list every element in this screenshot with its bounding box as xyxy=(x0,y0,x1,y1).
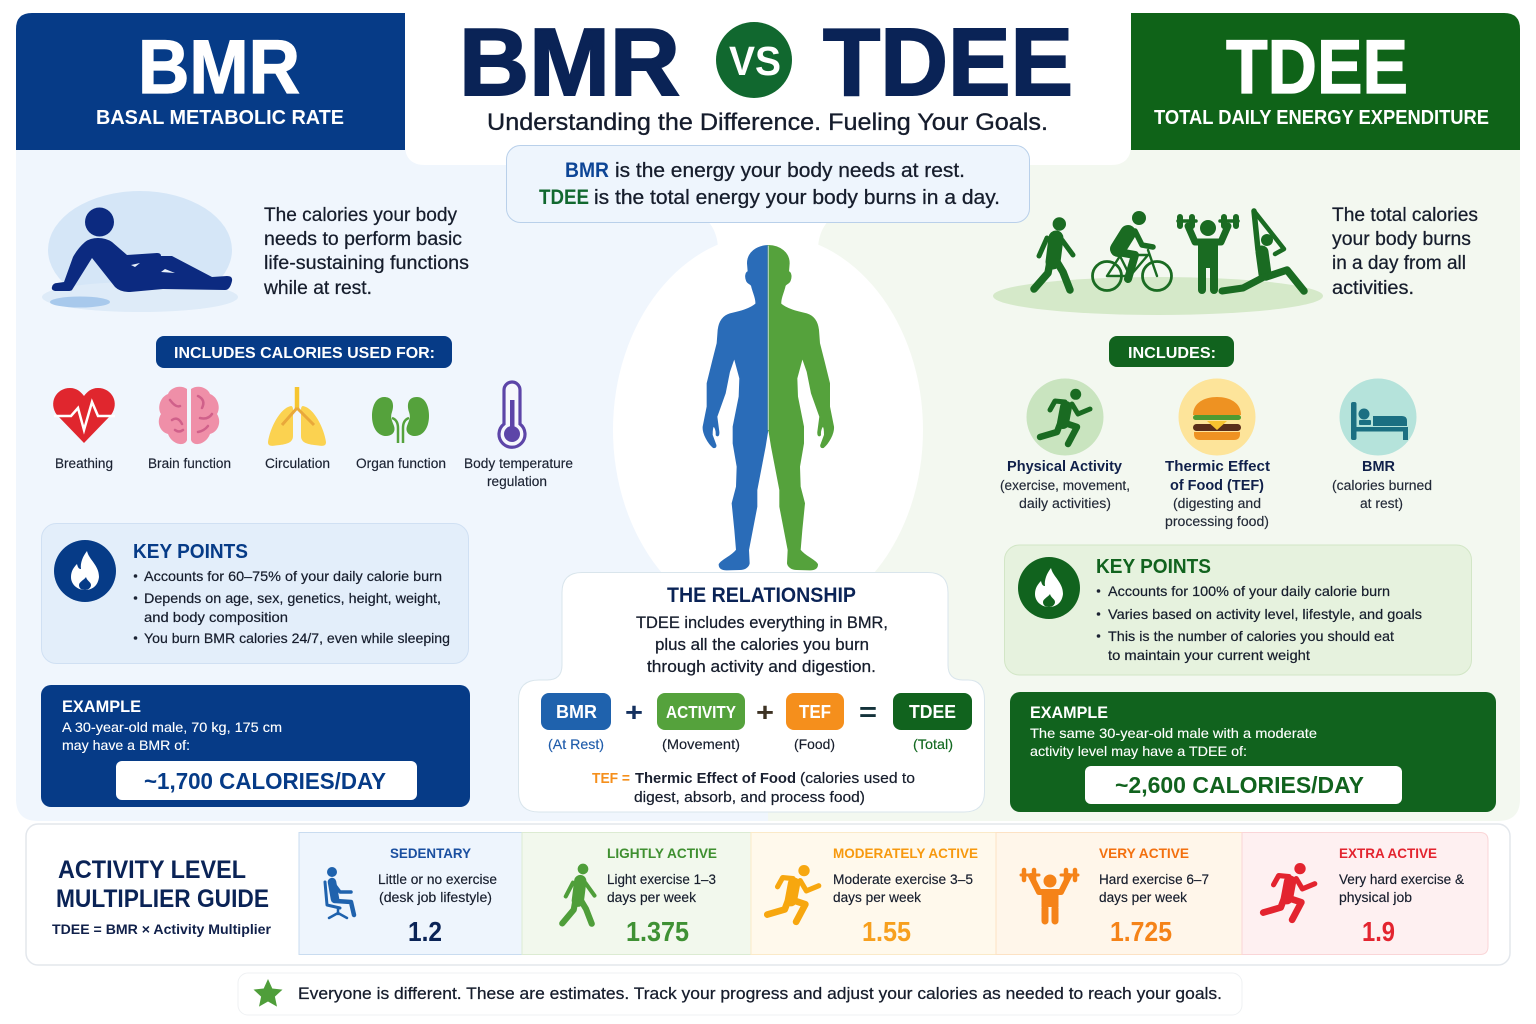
main title xyxy=(459,9,1073,116)
guide heading: MULTIPLIER GUIDE xyxy=(56,885,269,913)
heading: KEY POINTS xyxy=(1096,556,1211,578)
icon: running person xyxy=(767,865,819,922)
label: BMR component: (calories burned xyxy=(1332,478,1432,493)
label: body temperature regulation xyxy=(464,456,573,489)
equation: TEF: TEF xyxy=(799,701,831,722)
TDEE description: in a day from all xyxy=(1332,253,1466,274)
panel: TDEE example: The same 30-year-old male with a moderate xyxy=(1030,725,1317,741)
icon: lungs xyxy=(268,387,326,446)
icon: burger xyxy=(1178,378,1256,456)
TDEE description: activities. xyxy=(1332,278,1414,299)
TDEE description: your body burns xyxy=(1332,229,1471,250)
icon: flame xyxy=(1018,557,1080,619)
definition callout: BMR xyxy=(565,159,609,182)
plus sign: + xyxy=(625,697,643,727)
card: sedentary xyxy=(299,832,522,954)
description: plus all the calories you burn xyxy=(655,636,869,654)
icon: flame xyxy=(54,540,116,602)
card: lightly active: LIGHTLY ACTIVE xyxy=(607,845,717,861)
bullet list: Varies based on activity level, lifestyle, and goals xyxy=(1108,606,1422,622)
card: lightly active xyxy=(522,832,751,954)
icon: thermometer xyxy=(499,382,525,447)
bullet list xyxy=(1097,583,1422,663)
guide heading xyxy=(52,856,272,937)
background: BMR side xyxy=(16,140,775,821)
value: 2600 calories xyxy=(1085,766,1402,804)
equation: activity xyxy=(657,693,745,752)
BMR description: needs to perform basic xyxy=(264,229,462,250)
label: brain function: Brain function xyxy=(148,456,231,471)
header centre backing xyxy=(405,0,1131,165)
white centre halo behind the body xyxy=(613,220,923,626)
definition callout xyxy=(506,146,1030,222)
equation: BMR: (At Rest) xyxy=(548,736,604,752)
equation: TEF xyxy=(786,693,844,752)
equation: activity: (Movement) xyxy=(662,736,740,752)
bullet list: Accounts for 100% of your daily calorie burn xyxy=(1108,583,1390,599)
panel: TDEE example xyxy=(1010,692,1496,812)
pill: includes calories used for: INCLUDES CALORIES USED FOR: xyxy=(174,345,435,362)
label: organ function: Organ function xyxy=(356,456,446,471)
card: lightly active: days per week xyxy=(607,890,696,905)
yoga pose xyxy=(1222,211,1304,291)
panel: TDEE example: EXAMPLE xyxy=(1030,703,1108,722)
TDEE description: The total calories xyxy=(1332,205,1478,226)
label: physical activity xyxy=(1000,459,1130,511)
TDEE description xyxy=(1332,205,1478,299)
card: moderately active: days per week xyxy=(833,890,921,905)
card: lightly active: Light exercise 1–3 xyxy=(607,872,716,887)
panel: BMR key points xyxy=(42,524,468,664)
card: sedentary: (desk job lifestyle) xyxy=(379,890,492,905)
BMR description: life-sustaining functions xyxy=(264,253,469,274)
footer note: Everyone is different. These are estimates. Track your progress and adjust your calories as needed to reach your goals. xyxy=(298,985,1222,1003)
BMR description xyxy=(263,205,469,299)
definition callout: is the total energy your body burns in a day. xyxy=(594,186,1000,209)
TDEE header panel xyxy=(1131,13,1520,150)
bullet list: You burn BMR calories 24/7, even while sleeping xyxy=(144,630,450,646)
heading: THE RELATIONSHIP xyxy=(667,584,856,607)
panel: the relationship xyxy=(518,572,984,812)
equation: BMR xyxy=(541,693,611,752)
icon: weightlifter xyxy=(1021,870,1078,921)
card: extra active: physical job xyxy=(1339,890,1412,905)
TEF definition: Thermic Effect of Food xyxy=(635,770,796,787)
TEF definition xyxy=(592,770,915,806)
value: 1700 calories: ~1,700 CALORIES/DAY xyxy=(144,768,386,794)
BMR heading: BMR xyxy=(138,25,300,110)
card: moderately active: MODERATELY ACTIVE xyxy=(833,845,978,861)
illustration: activities group xyxy=(993,211,1323,315)
equation: TDEE: TDEE xyxy=(909,701,956,722)
weightlifter xyxy=(1178,217,1238,290)
illustration: split body silhouette xyxy=(703,246,833,570)
TDEE subheading: TOTAL DAILY ENERGY EXPENDITURE xyxy=(1154,107,1489,129)
card: lightly active: 1.375 xyxy=(626,916,689,947)
heading: KEY POINTS xyxy=(133,541,248,563)
icon: sprinting person xyxy=(1263,863,1315,920)
label: BMR component: BMR xyxy=(1362,459,1396,475)
card: extra active xyxy=(1242,832,1488,954)
main title: TDEE xyxy=(823,9,1073,116)
card: moderately active: Moderate exercise 3–5 xyxy=(833,872,973,887)
BMR subheading: BASAL METABOLIC RATE xyxy=(96,107,344,129)
bullet list xyxy=(134,568,450,646)
pill: includes: INCLUDES: xyxy=(1128,345,1216,362)
definition callout: TDEE xyxy=(539,186,589,209)
definition callout: is the energy your body needs at rest. xyxy=(615,159,965,182)
label: thermic effect of food xyxy=(1165,459,1270,529)
card: extra active: Very hard exercise & xyxy=(1339,872,1464,887)
card: very active: Hard exercise 6–7 xyxy=(1099,872,1209,887)
card: sedentary: 1.2 xyxy=(408,916,442,947)
label: breathing: Breathing xyxy=(55,456,113,471)
label: BMR component: at rest) xyxy=(1360,496,1403,511)
label: body temperature regulation: Body temperature xyxy=(464,456,573,471)
guide heading: ACTIVITY LEVEL xyxy=(58,856,246,884)
equation: TEF: (Food) xyxy=(794,736,835,752)
versus badge: VS xyxy=(729,38,781,84)
value: 1700 calories xyxy=(116,761,417,800)
tagline: Understanding the Difference. Fueling Your Goals. xyxy=(487,109,1048,136)
label: physical activity: daily activities) xyxy=(1019,496,1111,511)
icon: star xyxy=(254,979,282,1007)
equation: TDEE xyxy=(893,693,972,752)
versus badge xyxy=(716,22,792,98)
bullet list: Accounts for 60–75% of your daily calorie burn xyxy=(144,568,442,584)
panel: BMR example: A 30-year-old male, 70 kg, 175 cm xyxy=(62,719,282,735)
bullet list: This is the number of calories you should eat xyxy=(1108,628,1394,644)
card: very active: days per week xyxy=(1099,890,1187,905)
pill: includes xyxy=(1109,336,1234,367)
plus sign: + xyxy=(756,697,774,727)
icon: walking person xyxy=(562,864,594,924)
card: extra active: 1.9 xyxy=(1362,916,1395,947)
label: circulation: Circulation xyxy=(265,456,330,471)
pill: includes calories used for xyxy=(156,336,452,368)
TEF definition: (calories used to xyxy=(800,770,915,787)
icon: physical activity runner xyxy=(1026,378,1104,456)
label: BMR component xyxy=(1332,459,1432,511)
icon: heart xyxy=(53,388,115,443)
label: thermic effect of food: (digesting and xyxy=(1173,496,1261,511)
icon: kidneys xyxy=(372,397,429,443)
main title: BMR xyxy=(459,9,680,116)
panel: TDEE key points xyxy=(1004,545,1472,675)
TDEE heading: TDEE xyxy=(1226,25,1408,110)
card: extra active: EXTRA ACTIVE xyxy=(1339,845,1437,861)
bullet list: to maintain your current weight xyxy=(1108,647,1310,663)
icon: bed xyxy=(1340,378,1416,456)
walker xyxy=(1034,217,1073,290)
icon: seated person xyxy=(325,867,354,918)
TEF definition: TEF = xyxy=(592,770,630,787)
panel: BMR example xyxy=(41,685,470,807)
card: moderately active: 1.55 xyxy=(862,916,911,947)
equation: TDEE: (Total) xyxy=(913,736,953,752)
label: physical activity: Physical Activity xyxy=(1007,459,1122,475)
card: very active: VERY ACTIVE xyxy=(1099,845,1189,861)
label: physical activity: (exercise, movement, xyxy=(1000,478,1130,493)
guide heading: TDEE = BMR × Activity Multiplier xyxy=(52,921,272,937)
footer note xyxy=(238,973,1242,1015)
label: thermic effect of food: of Food (TEF) xyxy=(1170,478,1264,494)
value: 2600 calories: ~2,600 CALORIES/DAY xyxy=(1115,772,1364,798)
label: thermic effect of food: Thermic Effect xyxy=(1165,459,1270,475)
background: TDEE side xyxy=(768,140,1520,821)
description: through activity and digestion. xyxy=(647,658,876,676)
icon: resting person xyxy=(42,191,238,312)
equals sign: = xyxy=(859,697,877,727)
bullet list: and body composition xyxy=(144,609,288,625)
panel: TDEE example: activity level may have a TDEE of: xyxy=(1030,743,1247,759)
TEF definition: digest, absorb, and process food) xyxy=(634,789,865,806)
label: body temperature regulation: regulation xyxy=(487,474,547,489)
panel: activity level multiplier guide xyxy=(26,824,1510,965)
panel: BMR example: may have a BMR of: xyxy=(62,737,190,753)
card: very active xyxy=(996,832,1242,954)
icon: brain xyxy=(159,387,219,444)
description xyxy=(636,614,888,676)
BMR description: while at rest. xyxy=(263,278,372,299)
card: moderately active xyxy=(751,832,996,954)
BMR header panel xyxy=(16,13,405,150)
card: sedentary: Little or no exercise xyxy=(378,872,497,887)
card: sedentary: SEDENTARY xyxy=(390,845,472,861)
cyclist xyxy=(1092,211,1172,290)
bullet list: Depends on age, sex, genetics, height, weight, xyxy=(144,590,441,606)
equation: activity: ACTIVITY xyxy=(666,702,736,722)
BMR description: The calories your body xyxy=(264,205,457,226)
equation: BMR: BMR xyxy=(556,701,597,722)
label: thermic effect of food: processing food) xyxy=(1165,514,1269,529)
panel: BMR example: EXAMPLE xyxy=(62,697,141,716)
description: TDEE includes everything in BMR, xyxy=(636,614,888,632)
card: very active: 1.725 xyxy=(1110,916,1172,947)
